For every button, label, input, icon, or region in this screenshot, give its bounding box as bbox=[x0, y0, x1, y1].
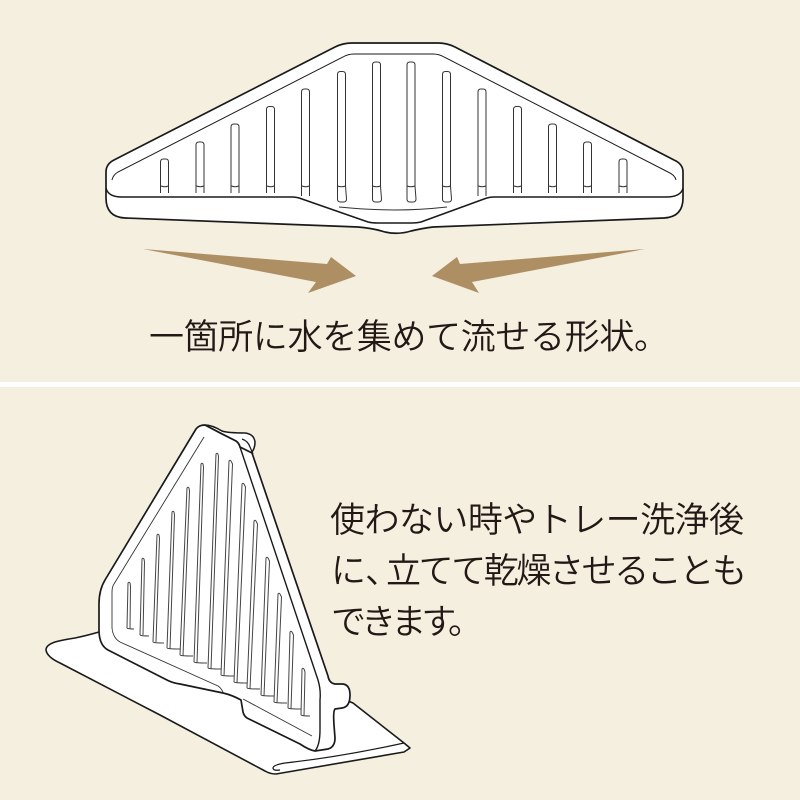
text block: drying note bbox=[330, 501, 747, 642]
cloth bbox=[46, 632, 410, 774]
arrow: pointing left bbox=[432, 249, 645, 293]
text block: drying note: に、 bbox=[331, 552, 400, 591]
panel: tray seen from above bbox=[106, 43, 683, 233]
rear tab curl bbox=[242, 439, 253, 454]
text block: drying note: 使わない時やトレー洗浄後 bbox=[330, 501, 744, 540]
tray body bbox=[106, 43, 683, 233]
arrow: pointing right bbox=[143, 249, 356, 293]
stand body bbox=[99, 425, 350, 751]
text block: drying note: できます。 bbox=[331, 603, 483, 642]
front edge of stand bbox=[207, 426, 320, 751]
tray centre curve bbox=[339, 207, 447, 210]
tray slots bbox=[160, 62, 627, 202]
rear tab bbox=[205, 425, 255, 470]
panel: tray standing upright on a cloth bbox=[46, 425, 410, 774]
cloth fold bbox=[273, 743, 404, 770]
stand slots bbox=[127, 453, 310, 716]
tray upper face edge bbox=[106, 188, 683, 223]
tray inner rim bbox=[112, 54, 676, 180]
text block: drying note: 立てて乾燥させることも bbox=[386, 552, 747, 591]
caption: shape description: 一箇所に水を集めて流せる形状。 bbox=[149, 318, 669, 357]
inner rim of stand bbox=[112, 437, 312, 736]
